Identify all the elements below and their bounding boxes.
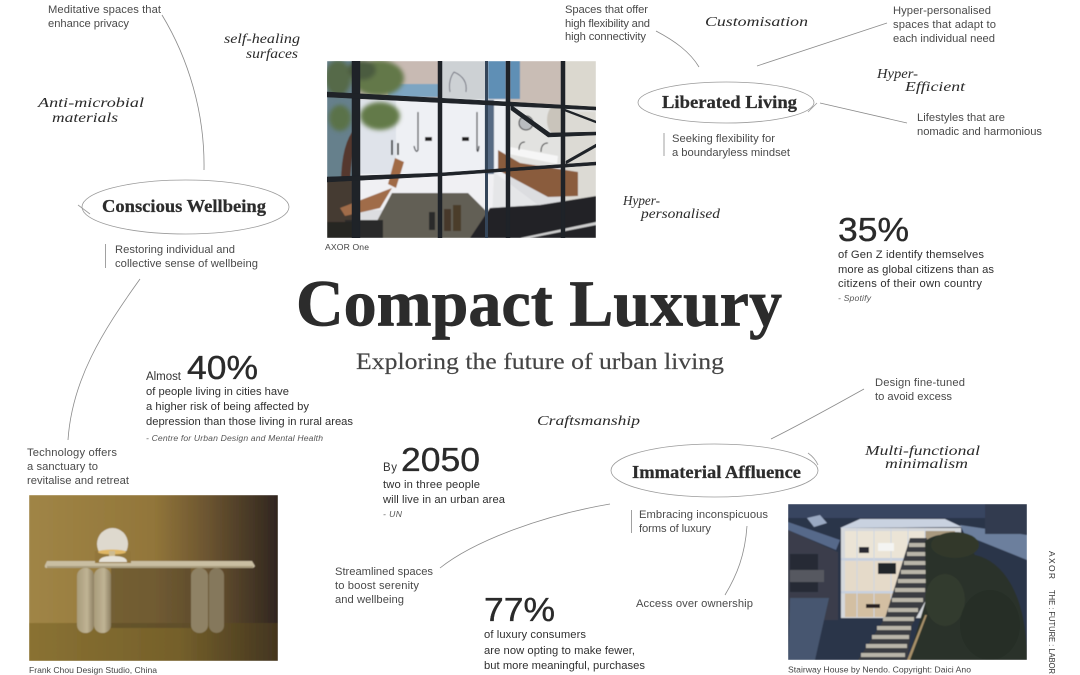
statistic: 35%: more as global citizens than as [838,264,994,276]
text: hyper-personalised spaces: spaces that adapt to [893,19,996,31]
statistic: almost 40%: depression than those living in rural areas [146,416,353,428]
connector: hyper-personalised to oval [757,23,887,66]
statistic: by 2050: will live in an urban area [382,494,506,506]
photo: AXOR One bathroom [325,60,596,238]
text: restoring sense of wellbeing: collective sense of wellbeing [115,258,258,270]
text: technology sanctuary: revitalise and retreat [27,475,130,487]
statistic: almost 40%: Almost [146,371,182,383]
statistic: 77%: but more meaningful, purchases [484,660,645,672]
connector: design to oval [771,389,864,439]
text: lifestyles: Lifestyles that are [917,112,1005,124]
statistic: 35%: of Gen Z identify themselves [838,249,984,261]
handwritten note: hyper-efficient: Hyper- [876,67,918,82]
statistic: 35% [838,211,994,303]
oval: Conscious Wellbeing [78,180,289,234]
connector: inconspicuous to access [725,526,747,595]
text: flexibility and connectivity: Spaces that offer [565,4,648,16]
text: technology sanctuary: Technology offers [27,447,117,459]
statistic: by 2050: - UN [383,509,403,519]
statistic: 77% [484,591,645,672]
text: flexibility and connectivity: high connectivity [565,31,646,43]
text: lifestyles: nomadic and harmonious [917,126,1042,138]
handwritten note: anti-microbial materials: Anti-microbial [37,96,144,111]
text: inconspicuous luxury: Embracing inconspicuous [639,509,768,521]
text: seeking flexibility: Seeking flexibility for [672,133,775,145]
text: technology sanctuary: a sanctuary to [27,461,98,473]
text: streamlined spaces: to boost serenity [335,580,419,592]
text: design fine-tuned: to avoid excess [875,391,952,403]
text: inconspicuous luxury: forms of luxury [639,523,711,535]
statistic: 35%: citizens of their own country [838,278,982,290]
handwritten note: self-healing surfaces: surfaces [246,47,299,62]
text: meditative spaces: Meditative spaces that [48,4,162,16]
panel: Liberated Living mind map [565,4,1042,222]
handwritten note: multi-functional minimalism: Multi-functional [864,444,980,459]
text: hyper-personalised spaces: Hyper-personalised [893,5,991,17]
text: restoring sense of wellbeing: Restoring individual and [115,244,235,256]
text: flexibility and connectivity: high flexibility and [565,18,650,30]
handwritten note: customisation: Customisation [705,15,808,30]
panel: Immaterial Affluence mind map [335,377,980,610]
title: Compact Luxury [296,268,782,340]
statistic: by 2050 [382,441,506,519]
connector: oval to streamlined [440,504,610,568]
vertical brand text [1047,551,1057,674]
handwritten note: hyper-efficient: Efficient [904,80,966,95]
photo: Stairway House [788,504,1027,660]
statistic: 35%: - Spotify [838,293,872,303]
statistic: by 2050: By [383,462,397,474]
handwritten note: hyper-personalised: Hyper- [622,194,660,209]
statistic: 35%: 35% [838,211,909,248]
text: seeking flexibility [664,133,791,159]
text: streamlined spaces: Streamlined spaces [335,566,433,578]
statistic: almost 40%: - Centre for Urban Design and Mental Health [146,433,323,443]
text: inconspicuous luxury [632,509,768,535]
statistic: almost 40%: 40% [187,349,258,386]
handwritten note: anti-microbial materials: materials [52,111,119,126]
statistic: by 2050: 2050 [401,441,480,478]
text: access over ownership: Access over ownership [636,598,753,610]
oval: Immaterial Affluence: Immaterial Affluence [632,462,801,482]
statistic: 77%: of luxury consumers [484,629,586,641]
connector: connectivity to oval [656,31,699,67]
oval: Immaterial Affluence [611,444,818,497]
vertical brand text: AXOR [1047,551,1057,579]
text: streamlined spaces: and wellbeing [335,594,404,606]
handwritten note: multi-functional minimalism: minimalism [885,457,968,472]
oval: Liberated Living [638,82,817,123]
caption: AXOR One: AXOR One [325,242,369,252]
caption: Stairway House: Stairway House by Nendo. Copyright: Daici Ano [788,664,971,674]
statistic: 77%: 77% [484,591,555,628]
text: seeking flexibility: a boundaryless mindset [672,147,791,159]
statistic: almost 40% [146,349,353,443]
oval: Liberated Living: Liberated Living [662,92,797,112]
text: restoring sense of wellbeing [106,244,258,270]
statistic: almost 40%: of people living in cities have [146,386,289,398]
text: design fine-tuned: Design fine-tuned [875,377,965,389]
connector: oval to lifestyles [820,103,907,123]
photo: table and lamp [29,495,278,661]
handwritten note: self-healing surfaces: self-healing [224,32,300,47]
statistic: almost 40%: a higher risk of being affected by [146,401,309,413]
caption: Frank Chou: Frank Chou Design Studio, China [29,665,157,675]
statistic: 77%: are now opting to make fewer, [484,645,635,657]
handwritten note: hyper-personalised: personalised [640,207,721,222]
panel: Conscious Wellbeing mind map [27,4,300,487]
statistic: by 2050: two in three people [383,479,480,491]
connector: meditative spaces to oval [162,15,204,170]
text: hyper-personalised spaces: each individual need [893,33,995,45]
subtitle: Exploring the future of urban living [356,349,725,374]
text: meditative spaces: enhance privacy [48,18,129,30]
connector: wellbeing to technology [68,279,140,440]
handwritten note: craftsmanship: Craftsmanship [537,414,640,429]
oval: Conscious Wellbeing: Conscious Wellbeing [102,196,266,216]
